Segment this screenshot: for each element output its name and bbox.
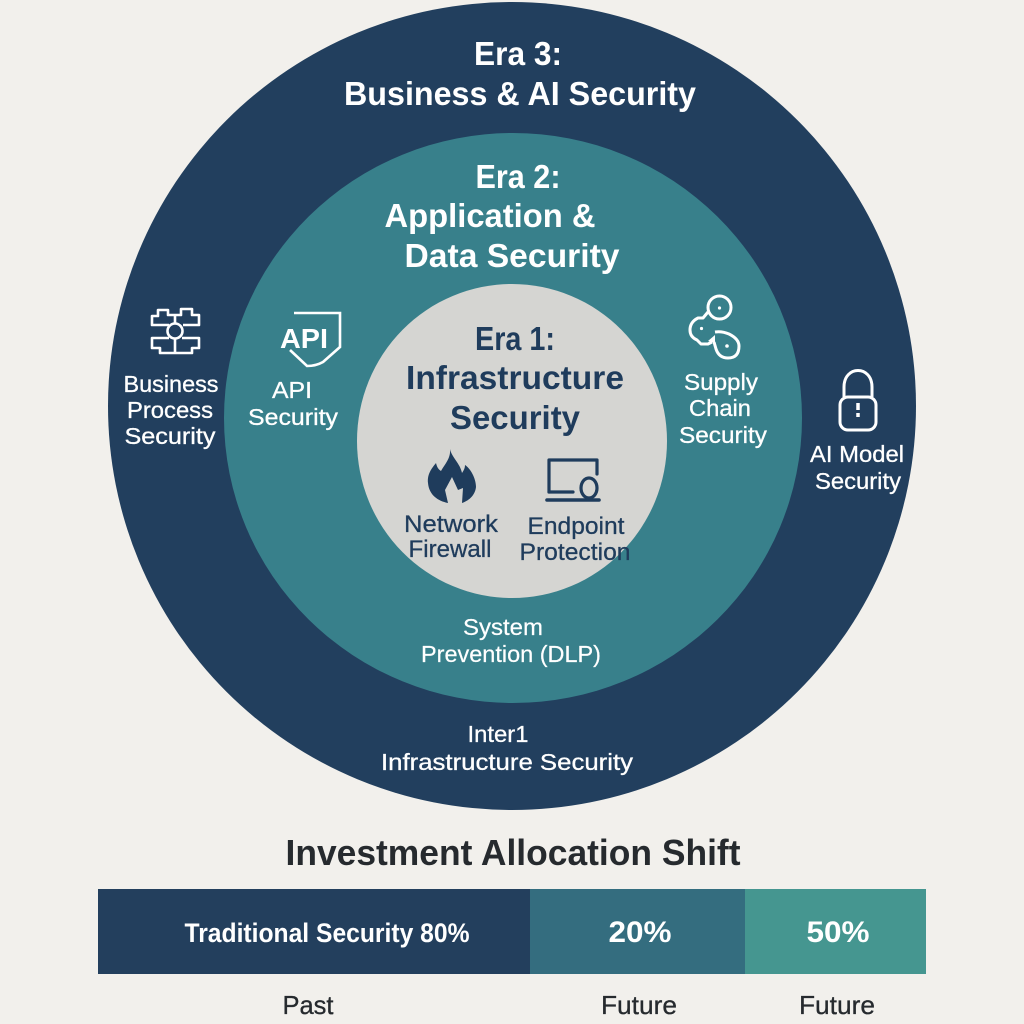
- heading: Era 2: Data Security: [404, 237, 620, 274]
- label: supply chain security: Chain: [689, 395, 751, 421]
- label: infrastructure security: Infrastructure Security: [381, 749, 634, 775]
- heading: Era 1: Infrastructure: [406, 359, 624, 396]
- label: business process security: [124, 371, 218, 449]
- icon: flame: [428, 449, 476, 503]
- middle ring: Era 2: [224, 133, 802, 703]
- outer ring: Era 3: [108, 2, 916, 810]
- label: business process security: Business: [124, 371, 218, 397]
- label: business process security: Process: [127, 397, 213, 423]
- chart title: Investment Allocation Shift: [286, 832, 741, 873]
- label: system prevention: System: [463, 614, 543, 640]
- heading: Era 3: Era 3:: [474, 35, 562, 72]
- heading: Era 2: [384, 158, 620, 274]
- label: endpoint protection: [520, 513, 630, 566]
- icon: API shield: API: [280, 323, 328, 354]
- icon: supply chain: [690, 296, 739, 358]
- icon: padlock: [840, 370, 876, 430]
- heading: Era 1: Security: [450, 399, 581, 436]
- label: API security: [248, 377, 339, 430]
- label: network firewall: [404, 511, 499, 563]
- label: API security: API: [272, 377, 312, 403]
- label: supply chain security: Security: [679, 422, 768, 448]
- label: AI model security: AI Model: [810, 441, 904, 467]
- bar segment: 50 percent: 50%: [806, 916, 870, 949]
- bar segment: traditional security: Traditional Security 80%: [184, 918, 470, 948]
- heading: Era 3: Business & AI Security: [344, 75, 697, 112]
- label: API security: Security: [248, 404, 339, 430]
- label: network firewall: Firewall: [408, 536, 492, 563]
- icon: laptop endpoint: [547, 460, 599, 500]
- heading: Era 1: [406, 320, 624, 436]
- label: network firewall: Network: [404, 511, 499, 538]
- label: endpoint protection: Protection: [520, 539, 630, 566]
- bar segment: 20 percent: 20%: [608, 916, 672, 949]
- axis label: future: Future: [601, 990, 677, 1020]
- label: endpoint protection: Endpoint: [528, 513, 625, 540]
- label: supply chain security: [679, 369, 768, 448]
- label: system prevention: Prevention (DLP): [421, 641, 601, 667]
- label: business process security: Security: [124, 423, 216, 449]
- axis label: future: Future: [799, 990, 875, 1020]
- heading: Era 2: Application &: [384, 197, 596, 234]
- heading: Era 3: [344, 35, 697, 112]
- bar segment: traditional security: [98, 889, 530, 974]
- bar segment: 50 percent: [745, 889, 926, 974]
- label: system prevention: [421, 614, 601, 667]
- inner circle: Era 1: [357, 284, 667, 598]
- icon: API shield: [280, 313, 340, 366]
- axis label: past: Past: [282, 990, 334, 1020]
- label: supply chain security: Supply: [684, 369, 759, 395]
- heading: Era 2: Era 2:: [476, 158, 560, 195]
- stacked bar chart: [98, 889, 926, 974]
- label: AI model security: Security: [815, 468, 902, 494]
- icon: business process: [152, 309, 199, 353]
- label: infrastructure security: Inter1: [468, 721, 528, 747]
- heading: Era 1: Era 1:: [475, 320, 555, 357]
- bar segment: 20 percent: [530, 889, 745, 974]
- label: infrastructure security: [381, 721, 634, 775]
- label: AI model security: [810, 441, 904, 494]
